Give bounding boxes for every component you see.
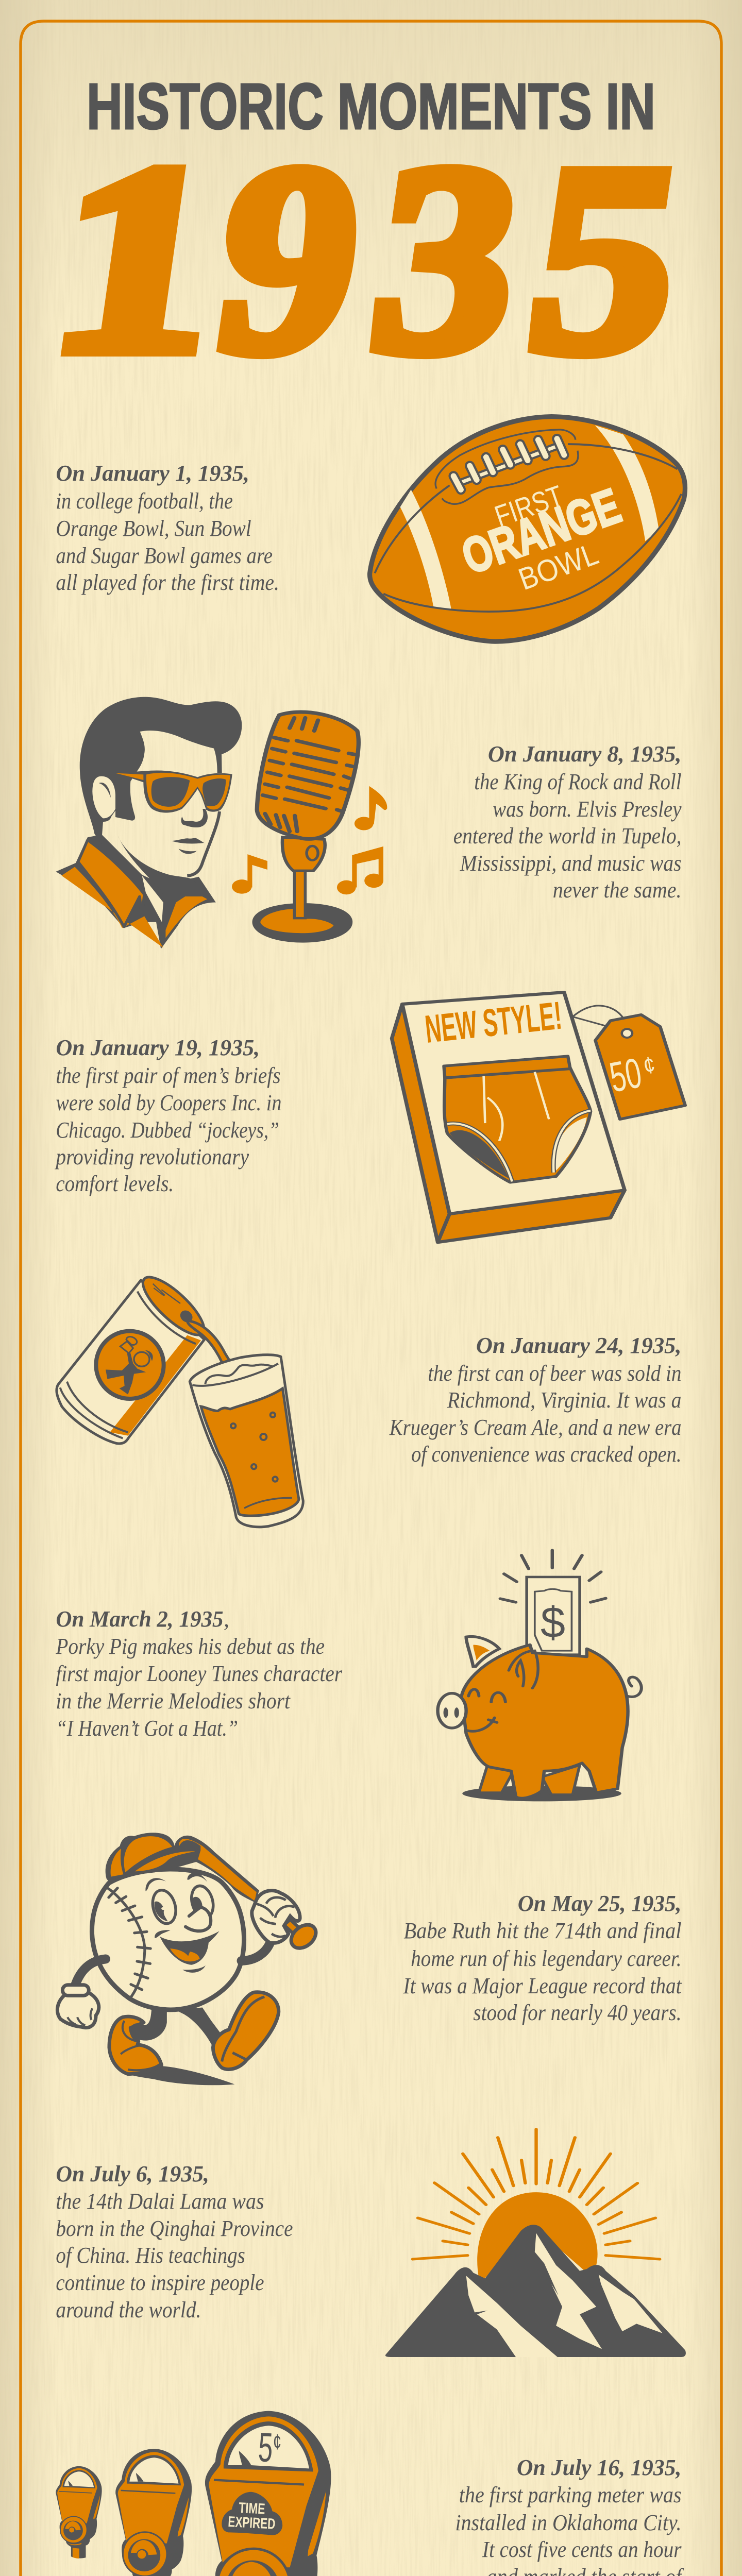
event text: January 24: the first can of beer was sold in — [428, 1361, 681, 1386]
glass — [190, 1355, 303, 1527]
year 1935: 3 — [356, 109, 537, 409]
football label: FIRST — [491, 479, 567, 533]
nose and lips — [181, 809, 208, 827]
price tag — [572, 1006, 627, 1028]
icon: piggy bank with dollar bill — [438, 1550, 642, 1801]
icon: three parking meters — [56, 2411, 331, 2576]
can — [57, 1280, 205, 1444]
event text: May 25 — [403, 1891, 682, 2025]
event text: July 16: the first parking meter was — [459, 2482, 681, 2507]
music notes — [232, 786, 387, 894]
event text: May 25: On May 25, 1935, — [518, 1891, 681, 1916]
icon: football — [370, 417, 685, 641]
stream — [187, 1320, 236, 1374]
event text: January 8: was born. Elvis Presley — [493, 796, 682, 822]
right shoe — [213, 1992, 279, 2069]
event text: July 6 — [56, 2161, 293, 2323]
arms — [75, 1943, 270, 1985]
event text: July 6: born in the Qinghai Province — [56, 2216, 293, 2241]
year 1935: 9 — [201, 109, 378, 409]
icon: baseball mascot — [57, 1833, 321, 2085]
event text: January 1: and Sugar Bowl games are — [56, 543, 273, 568]
event text: January 1 — [56, 461, 279, 595]
year 1935 — [36, 109, 698, 409]
event text: January 24: of convenience was cracked open. — [411, 1442, 681, 1467]
event text: March 2: “I Haven’t Got a Hat.” — [56, 1716, 238, 1741]
event text: January 1: Orange Bowl, Sun Bowl — [56, 516, 251, 541]
icon: microphone and music notes — [232, 712, 387, 943]
event text: May 25: It was a Major League record that — [403, 1973, 682, 1998]
event text: January 8: never the same. — [553, 877, 681, 903]
event text: July 6: the 14th Dalai Lama was — [56, 2189, 264, 2214]
legs — [176, 2007, 222, 2047]
event text: January 24: On January 24, 1935, — [476, 1333, 681, 1358]
football label — [455, 478, 628, 597]
event text: January 19 — [55, 1035, 281, 1196]
football label: BOWL — [514, 536, 603, 597]
event text: July 16 — [456, 2455, 684, 2576]
year 1935: 1 — [36, 109, 240, 409]
shirt and collar — [56, 835, 216, 949]
event text: January 24 — [389, 1333, 681, 1467]
icon: boxed briefs with price tag: NEW STYLE! — [423, 994, 564, 1052]
jaw and face line — [117, 836, 211, 896]
can label — [96, 1331, 164, 1399]
event text: January 8: On January 8, 1935, — [488, 741, 681, 767]
event text: May 25: Babe Ruth hit the 714th and final — [403, 1918, 681, 1943]
stitches — [108, 1888, 150, 1998]
event text: March 2 — [56, 1606, 343, 1741]
event text: May 25: home run of his legendary career. — [411, 1946, 681, 1971]
event text: January 19: On January 19, 1935, — [56, 1035, 260, 1060]
event text: January 8 — [453, 741, 682, 903]
event text: January 1: all played for the first time. — [56, 570, 279, 595]
event text: January 19: were sold by Coopers Inc. in — [56, 1090, 282, 1115]
event text: July 6: On July 6, 1935, — [56, 2161, 209, 2187]
icon: three parking meters: TIME — [239, 2500, 265, 2518]
sunglasses — [115, 770, 232, 812]
event text: January 19: comfort levels. — [56, 1171, 174, 1196]
event text: July 16: installed in Oklahoma City. — [456, 2510, 681, 2535]
icon: boxed briefs with price tag: ¢ — [641, 1051, 657, 1079]
icon: three parking meters: 5 — [257, 2424, 274, 2470]
ball — [92, 1869, 244, 2010]
event text: January 8: entered the world in Tupelo, — [453, 823, 681, 849]
event text: January 19: Chicago. Dubbed “jockeys,” — [56, 1117, 279, 1143]
event text: January 19: the first pair of men’s briefs — [56, 1063, 281, 1088]
icon: boxed briefs with price tag: 50 — [606, 1049, 645, 1101]
right hand with bat — [284, 1920, 300, 1935]
face — [145, 1873, 207, 1891]
event text: March 2: Porky Pig makes his debut as the — [56, 1634, 325, 1659]
icon: boxed briefs with price tag — [392, 992, 685, 1242]
briefs — [444, 1068, 591, 1182]
event text: July 16: It cost five cents an hour — [482, 2537, 682, 2562]
shadow — [123, 2066, 234, 2085]
event text: May 25: stood for nearly 40 years. — [473, 2000, 681, 2025]
event text: July 6: of China. His teachings — [56, 2243, 245, 2268]
icon: beer can pouring into glass — [57, 1269, 303, 1527]
event text: January 1: On January 1, 1935, — [56, 461, 249, 486]
event text: January 19: providing revolutionary — [55, 1144, 249, 1170]
football label: ORANGE — [455, 478, 628, 585]
event text: March 2: in the Merrie Melodies short — [56, 1688, 291, 1714]
icon: three parking meters: ¢ — [273, 2430, 281, 2454]
icon: three parking meters: EXPIRED — [228, 2514, 276, 2533]
icon: sun rising over mountains — [385, 2129, 686, 2357]
event text: July 6: around the world. — [56, 2297, 201, 2323]
event text: January 24: Krueger’s Cream Ale, and a new era — [389, 1415, 681, 1440]
dollar sign: $ — [541, 1598, 565, 1647]
event text: March 2: first major Looney Tunes character — [56, 1661, 343, 1686]
event text: January 8: the King of Rock and Roll — [474, 769, 681, 794]
event text: January 24: Richmond, Virginia. It was a — [447, 1387, 681, 1413]
event text: January 8: Mississippi, and music was — [460, 851, 681, 876]
event text: July 16: On July 16, 1935, — [517, 2455, 681, 2480]
event text: March 2: On March 2, 1935 — [56, 1606, 224, 1632]
event text: March 2: , — [224, 1606, 229, 1632]
year 1935: 5 — [513, 109, 698, 409]
event text: July 6: continue to inspire people — [56, 2270, 264, 2295]
hair — [80, 697, 242, 844]
icon: Elvis head — [56, 697, 242, 949]
left hand — [57, 1993, 99, 2028]
left shoe — [109, 2016, 162, 2074]
event text: January 1: in college football, the — [56, 488, 233, 514]
cap and bat — [106, 1833, 259, 1903]
